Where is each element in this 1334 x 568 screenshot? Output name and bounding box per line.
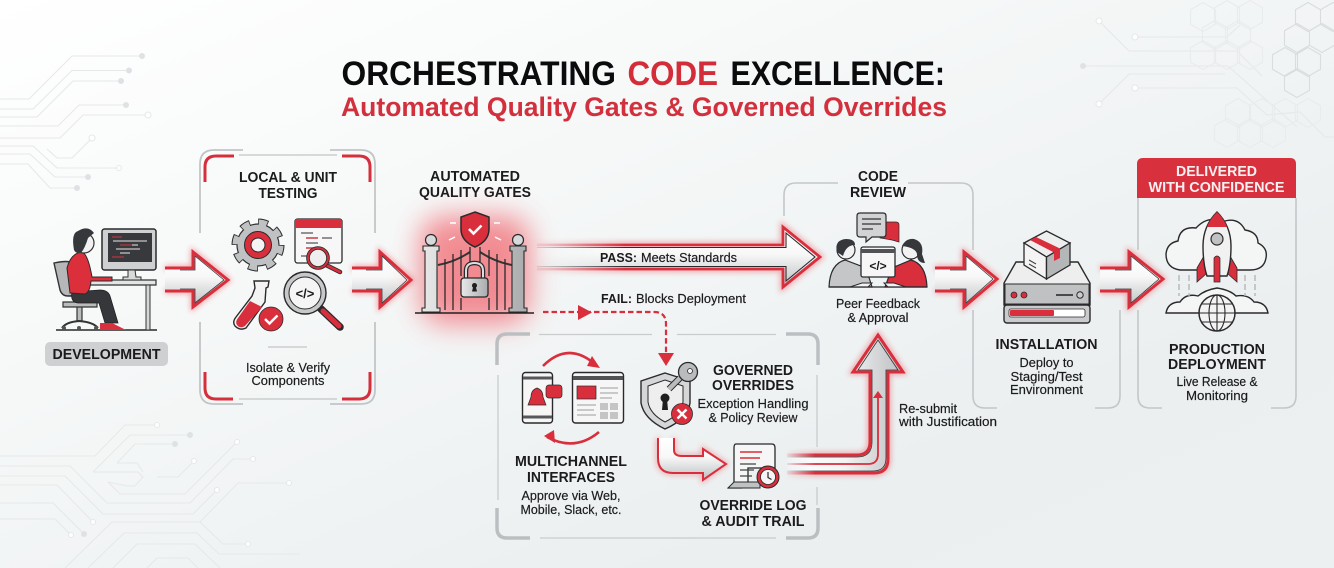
panel: code review	[784, 169, 973, 325]
banner: delivered with confidence: WITH CONFIDENCE	[1148, 180, 1285, 196]
icon: multichannel devices	[522, 353, 624, 443]
text: approve via web	[520, 489, 622, 517]
arrow: pass to code review	[537, 227, 820, 287]
banner: delivered with confidence	[1137, 158, 1296, 198]
icon: test flask	[234, 281, 283, 331]
title: ORCHESTRATING	[342, 55, 616, 93]
heading: multichannel interfaces	[515, 454, 627, 486]
heading: local and unit testing: LOCAL & UNIT	[239, 170, 337, 186]
heading: governed overrides	[712, 363, 794, 394]
text: live release: Monitoring	[1186, 389, 1248, 403]
text: re-submit with justification: with Justification	[898, 415, 997, 429]
icon: gear	[236, 222, 280, 268]
heading: automated quality gates: QUALITY GATES	[419, 185, 531, 201]
arrow: development to testing	[165, 252, 228, 307]
text: deploy to staging: Environment	[1010, 383, 1084, 397]
label: fail	[601, 291, 747, 306]
title: CODE	[628, 55, 718, 93]
text: isolate and verify: Components	[252, 374, 324, 388]
heading: code review	[850, 169, 906, 201]
heading: local and unit testing	[239, 170, 337, 202]
text: deploy to staging	[1010, 356, 1084, 397]
icon: shield with key	[641, 362, 698, 429]
icon: gate with lock and shield	[415, 212, 534, 326]
text: deploy to staging: Deploy to	[1020, 356, 1074, 370]
icon: browser with magnifier	[295, 219, 342, 272]
arrow: overrides to audit log	[658, 438, 726, 480]
arrow: testing to quality gates	[352, 252, 411, 307]
heading: production deployment	[1168, 342, 1266, 373]
panel: production deployment	[1137, 158, 1296, 408]
label: pass: Meets Standards	[641, 251, 737, 265]
icon: code magnifier: </>	[296, 286, 315, 301]
text: live release: Live Release &	[1176, 375, 1258, 389]
icon: server with package	[1004, 231, 1090, 323]
icon: developer at desk	[54, 228, 157, 330]
label: fail: FAIL:	[601, 291, 632, 306]
label: fail: Blocks Deployment	[636, 292, 747, 306]
panel: governed overrides group	[497, 334, 818, 538]
icon: audit scroll with clock	[728, 444, 779, 488]
heading: automated quality gates	[419, 169, 531, 201]
heading: multichannel interfaces: INTERFACES	[527, 470, 615, 486]
label: development: DEVELOPMENT	[52, 347, 161, 363]
text: peer feedback: & Approval	[848, 311, 908, 325]
text: live release	[1176, 375, 1258, 403]
text: re-submit with justification: Re-submit	[899, 402, 958, 416]
text: approve via web: Approve via Web,	[522, 489, 620, 503]
heading: installation: INSTALLATION	[996, 337, 1098, 353]
subtitle: Automated Quality Gates & Governed Overrides	[341, 92, 947, 122]
heading: governed overrides: OVERRIDES	[712, 378, 794, 394]
title: EXCELLENCE:	[730, 55, 945, 93]
banner: delivered with confidence: DELIVERED	[1176, 164, 1257, 180]
panel: development	[45, 228, 168, 366]
text: approve via web: Mobile, Slack, etc.	[520, 503, 622, 517]
arrow: resubmit to code review	[787, 335, 903, 473]
label: pass	[600, 250, 737, 265]
text: isolate and verify	[246, 361, 331, 388]
text: re-submit with justification	[898, 402, 997, 429]
icon: peer review	[829, 213, 927, 287]
text: peer feedback	[836, 297, 921, 325]
icon: code magnifier	[284, 272, 340, 327]
icon: peer review: </>	[869, 259, 887, 273]
arrow: code review to installation	[935, 252, 997, 307]
heading: code review: REVIEW	[850, 185, 906, 201]
heading: production deployment: DEPLOYMENT	[1168, 357, 1266, 373]
arrow: fail dashed path	[543, 305, 674, 366]
heading: multichannel interfaces: MULTICHANNEL	[515, 454, 627, 470]
text: exception handling: Exception Handling	[698, 397, 809, 411]
text: exception handling	[698, 397, 809, 425]
heading: override log: & AUDIT TRAIL	[702, 514, 805, 530]
heading: governed overrides: GOVERNED	[713, 363, 793, 379]
icon: rocket launching through clouds	[1166, 212, 1268, 331]
title	[342, 55, 945, 93]
heading: code review: CODE	[858, 169, 898, 185]
panel: automated quality gates	[415, 169, 534, 326]
panel: installation	[973, 231, 1120, 408]
heading: override log: OVERRIDE LOG	[700, 498, 806, 514]
arrow: installation to production	[1100, 252, 1163, 307]
heading: override log	[700, 498, 806, 530]
text: deploy to staging: Staging/Test	[1010, 370, 1083, 384]
text: peer feedback: Peer Feedback	[836, 297, 921, 311]
heading: automated quality gates: AUTOMATED	[430, 169, 520, 185]
heading: production deployment: PRODUCTION	[1169, 342, 1265, 358]
text: exception handling: & Policy Review	[708, 411, 798, 425]
heading: local and unit testing: TESTING	[258, 186, 318, 202]
label: pass: PASS:	[600, 250, 637, 265]
panel: local and unit testing	[200, 150, 375, 404]
text: isolate and verify: Isolate & Verify	[246, 361, 331, 375]
